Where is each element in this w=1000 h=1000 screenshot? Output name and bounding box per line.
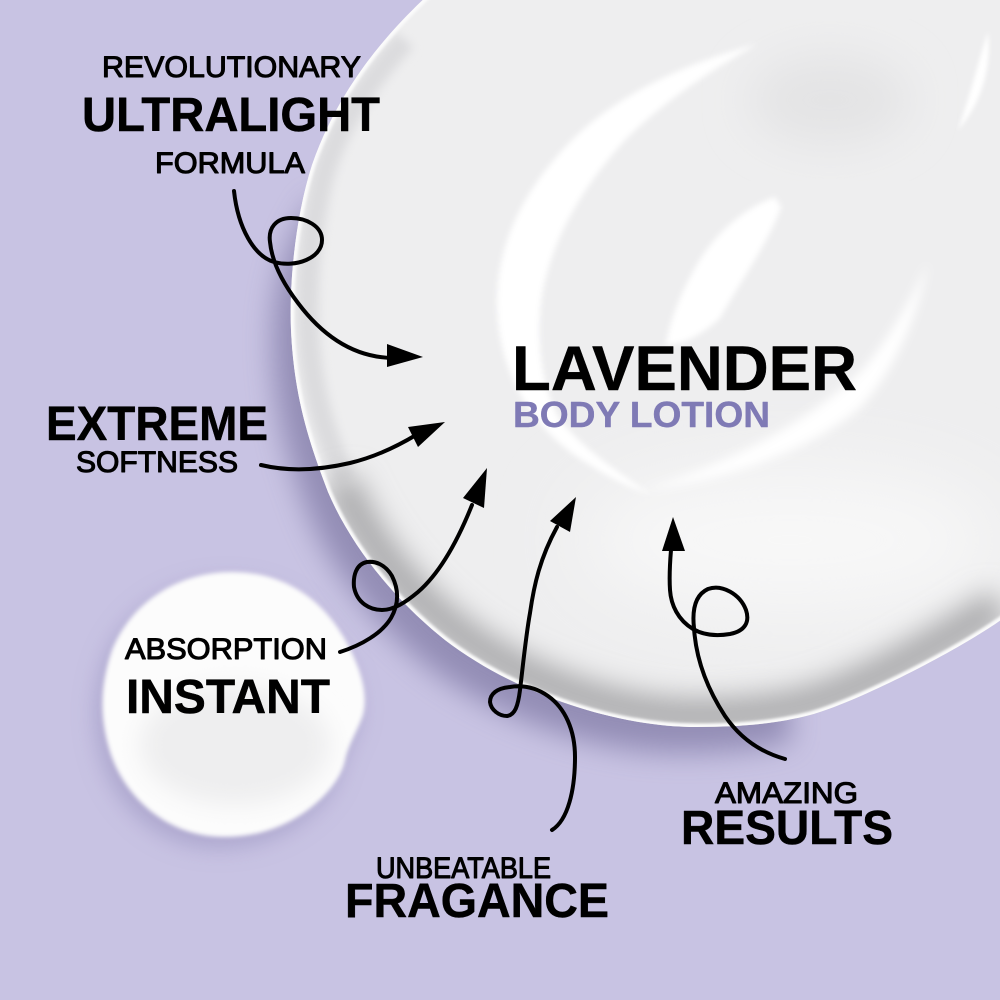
lower body light [678, 510, 906, 570]
callout: unbeatable fragance [345, 852, 609, 928]
callout: revolutionary ultralight formula: ULTRALIGHT [82, 89, 380, 142]
arrow: absorption to center [340, 468, 487, 652]
drop inner shading [144, 688, 326, 802]
arrow: results to center [662, 517, 785, 759]
subtitle: BODY LOTION [513, 394, 770, 435]
arrow: softness to center [261, 422, 445, 469]
callout: amazing results: AMAZING [715, 777, 858, 810]
arrow: ultralight to center [234, 191, 423, 367]
title: lavender body lotion [512, 334, 857, 435]
callout: absorption instant: INSTANT [126, 671, 330, 724]
top right highlight [962, 40, 988, 123]
blob body [291, 0, 1000, 727]
center spike highlight [666, 197, 781, 345]
drop shadow [96, 582, 359, 847]
callout: absorption instant: ABSORPTION [125, 633, 327, 666]
callout: absorption instant [125, 633, 330, 724]
callout: extreme softness: SOFTNESS [76, 446, 238, 479]
title: lavender body lotion: LAVENDER [512, 334, 857, 404]
blob shadow [273, 196, 792, 753]
callout: revolutionary ultralight formula: REVOLUTIONARY [102, 51, 361, 84]
callout: extreme softness: EXTREME [46, 398, 268, 451]
callout: revolutionary ultralight formula: FORMULA [155, 147, 305, 180]
outer rim highlight [291, 0, 1000, 727]
small lotion drop [96, 572, 365, 847]
arrow: fragrance to center [490, 497, 576, 830]
callout: unbeatable fragance: FRAGANCE [345, 875, 609, 928]
drop body [102, 572, 365, 837]
callout: unbeatable fragance: UNBEATABLE [376, 852, 551, 885]
callout: amazing results [681, 777, 893, 855]
bottom inner shading [340, 480, 1000, 716]
callout: extreme softness [46, 398, 268, 479]
callout: revolutionary ultralight formula [82, 51, 380, 180]
large lotion blob [273, 0, 1000, 753]
left inner shading [308, 40, 405, 480]
top dark patch [783, 76, 877, 124]
callout: amazing results: RESULTS [681, 802, 893, 855]
right crescent highlight [696, 292, 918, 476]
crescent highlight [497, 44, 757, 494]
